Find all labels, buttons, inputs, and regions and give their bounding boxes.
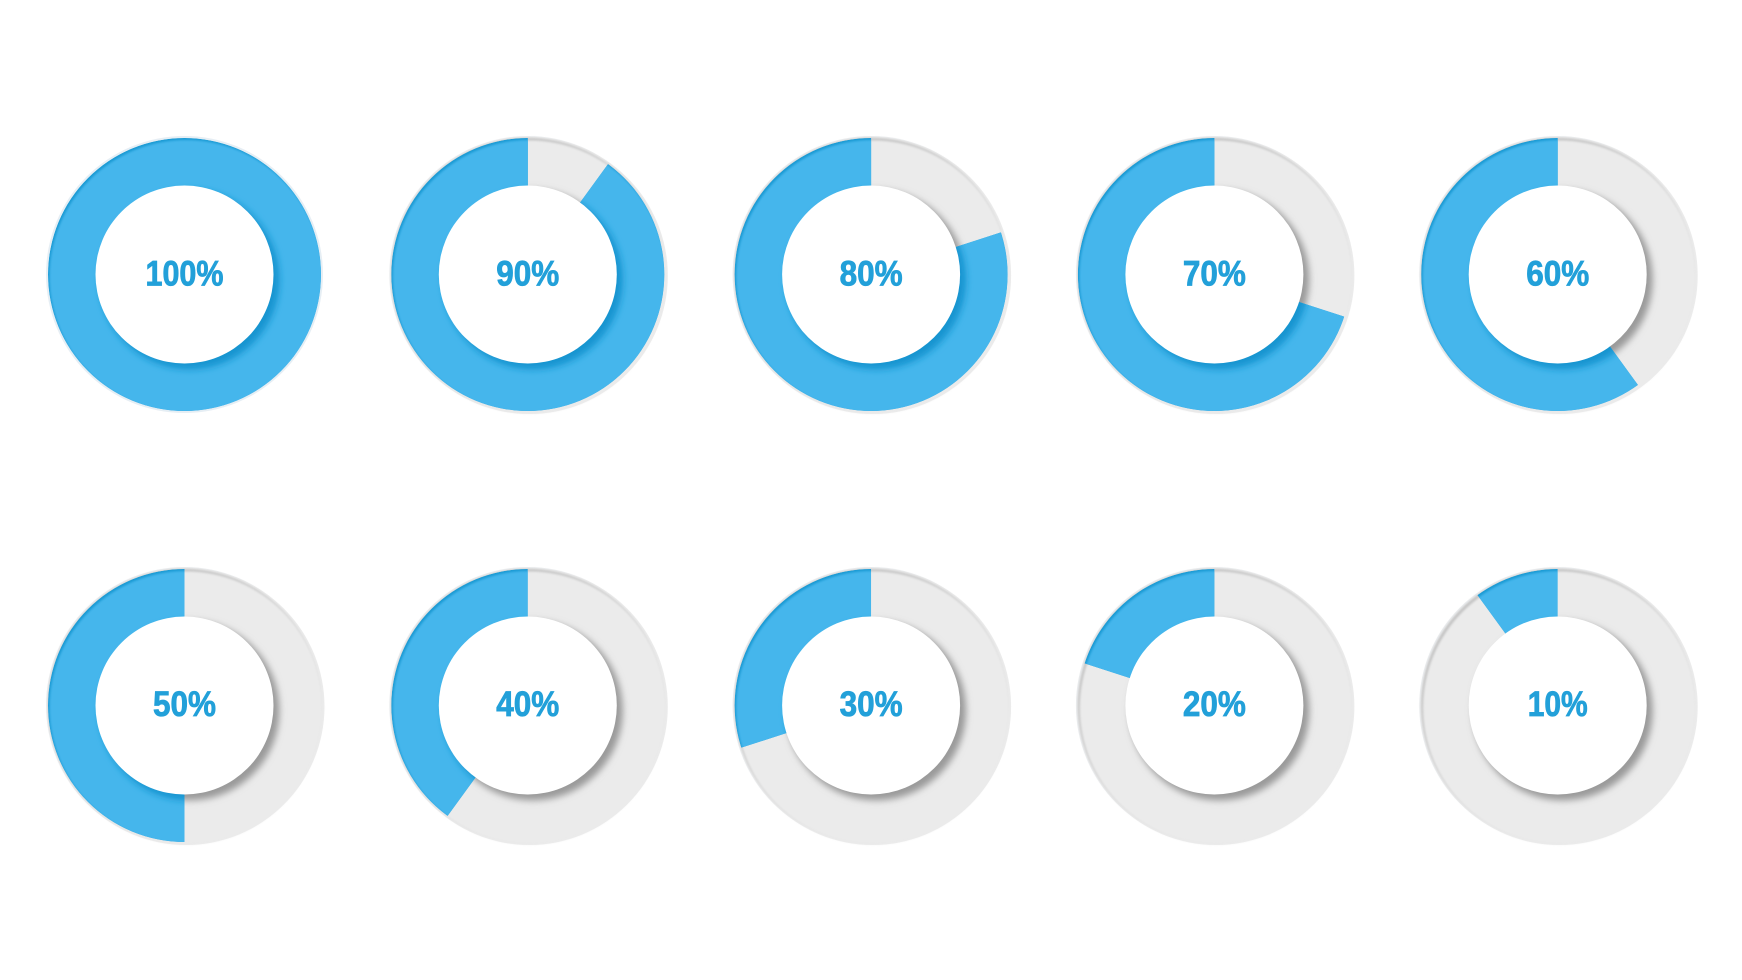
donut chart: 30%: 30%: [840, 685, 903, 724]
donut chart: 20%: [1076, 567, 1354, 845]
donut chart: 90%: [389, 136, 668, 414]
donut chart: 30%: [733, 567, 1011, 845]
donut chart: 10%: 10%: [1528, 685, 1588, 724]
donut chart: 40%: [389, 567, 668, 845]
donut chart: 60%: 60%: [1526, 254, 1589, 294]
donut chart: 80%: 80%: [840, 254, 903, 294]
donut chart: 20%: 20%: [1183, 685, 1246, 724]
donut chart: 50%: [46, 567, 324, 845]
donut chart: 70%: 70%: [1183, 254, 1246, 294]
donut chart: 80%: [733, 136, 1011, 414]
donut chart: 60%: [1419, 136, 1698, 414]
donut chart: 70%: [1076, 136, 1354, 414]
donut chart: 10%: [1419, 567, 1698, 845]
donut chart: 40%: 40%: [496, 685, 559, 724]
donut chart: 50%: 50%: [153, 685, 216, 724]
donut chart: 90%: 90%: [496, 254, 559, 294]
donut chart: 100%: [46, 136, 323, 413]
donut chart: 100%: 100%: [146, 254, 224, 294]
